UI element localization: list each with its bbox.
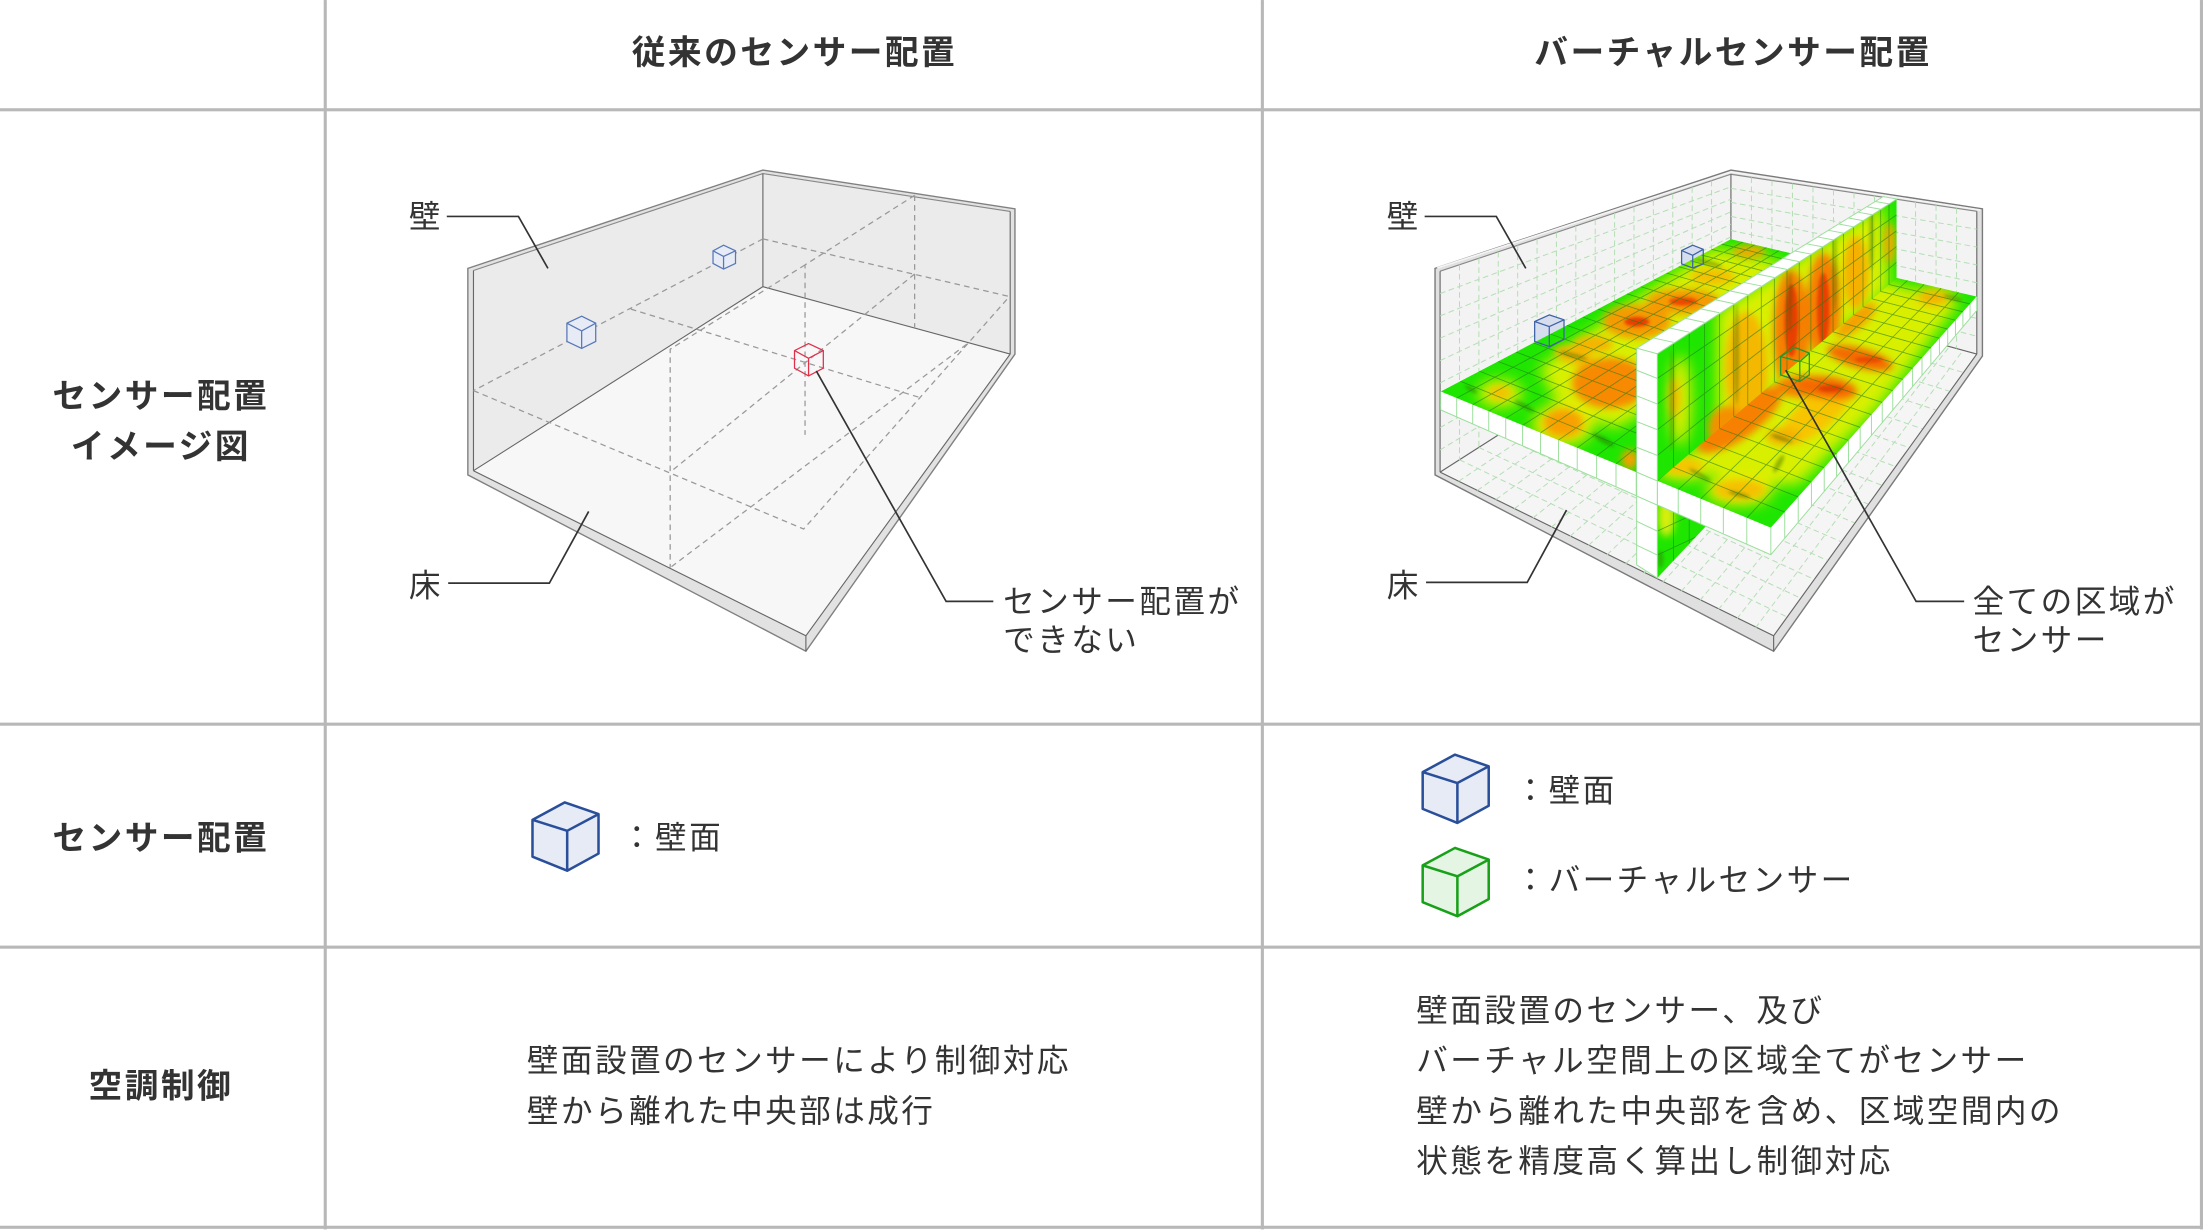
dashed zone lines	[473, 195, 1009, 568]
icon: wall sensor far	[1682, 245, 1703, 268]
label: wall	[409, 199, 548, 268]
icon: wall sensor near	[567, 316, 596, 348]
room shell	[468, 170, 1015, 651]
label: wall	[1387, 199, 1526, 268]
column heading: virtual: バーチャルセンサー配置	[1534, 34, 1932, 72]
row heading: image diagram: センサー配置	[52, 377, 269, 415]
callout: sensor cannot be placed: センサー配置が	[1003, 584, 1241, 620]
legend: virtual sensor	[1423, 848, 1855, 916]
icon: blue cube	[1423, 755, 1489, 823]
legend: virtual panel wall sensor: ：壁面	[1515, 773, 1617, 809]
callout: all zones are sensors: センサー	[1973, 622, 2109, 658]
callout: all zones are sensors: 全ての区域が	[1973, 584, 2177, 620]
wall and floor virtual grid	[1440, 177, 1977, 628]
row heading: sensor placement: センサー配置	[52, 819, 269, 857]
icon: impossible sensor position	[795, 344, 823, 376]
icon: wall sensor near	[1535, 315, 1564, 347]
label: floor: 床	[1387, 567, 1421, 603]
text block: virtual HVAC control: 壁から離れた中央部を含め、区域空間内の	[1416, 1093, 2063, 1129]
horizontal heat map	[1441, 239, 1977, 528]
legend: conventional wall sensor: ：壁面	[621, 820, 723, 856]
label: floor	[1387, 510, 1567, 603]
icon: virtual sensor	[1781, 347, 1809, 381]
label: floor: 床	[409, 567, 443, 603]
text block: conventional HVAC control	[527, 1043, 1071, 1129]
icon: blue cube	[532, 802, 599, 871]
room shell	[1435, 170, 1982, 651]
icon: green cube	[1423, 848, 1489, 916]
callout: all zones are sensors	[1786, 370, 2177, 658]
vertical heat map	[1657, 199, 1897, 481]
row heading: image diagram: イメージ図	[71, 428, 251, 466]
row heading: image diagram	[52, 377, 269, 466]
text block: virtual HVAC control: 壁面設置のセンサー、及び	[1416, 993, 1824, 1029]
panel: conventional room diagram	[468, 170, 1015, 651]
label: floor	[409, 511, 589, 603]
wall sensor bodies behind heat plane	[1535, 245, 1703, 347]
text block: conventional HVAC control: 壁から離れた中央部は成行	[527, 1093, 935, 1129]
label: wall: 壁	[409, 199, 443, 235]
vertical heat plane lower part	[1658, 506, 1706, 578]
white edge of vertical plane	[1637, 197, 1897, 578]
callout: sensor cannot be placed: できない	[1003, 622, 1139, 658]
horizontal heat plane side band	[1441, 296, 1977, 555]
legend: virtual panel wall sensor	[1423, 755, 1617, 823]
label: wall: 壁	[1387, 199, 1421, 235]
text block: virtual HVAC control: 状態を精度高く算出し制御対応	[1416, 1143, 1893, 1179]
text block: conventional HVAC control: 壁面設置のセンサーにより制御対応	[527, 1043, 1071, 1079]
column heading: conventional: 従来のセンサー配置	[632, 34, 957, 72]
legend: conventional wall sensor	[532, 802, 723, 871]
row heading: HVAC control: 空調制御	[89, 1067, 233, 1105]
text block: virtual HVAC control: バーチャル空間上の区域全てがセンサー	[1416, 1043, 2029, 1079]
panel: virtual sensor room diagram	[1435, 170, 1982, 651]
legend: virtual sensor: ：バーチャルセンサー	[1515, 862, 1855, 898]
callout: sensor cannot be placed	[816, 371, 1241, 658]
icon: wall sensor far	[713, 245, 736, 269]
text block: virtual HVAC control	[1416, 993, 2063, 1179]
